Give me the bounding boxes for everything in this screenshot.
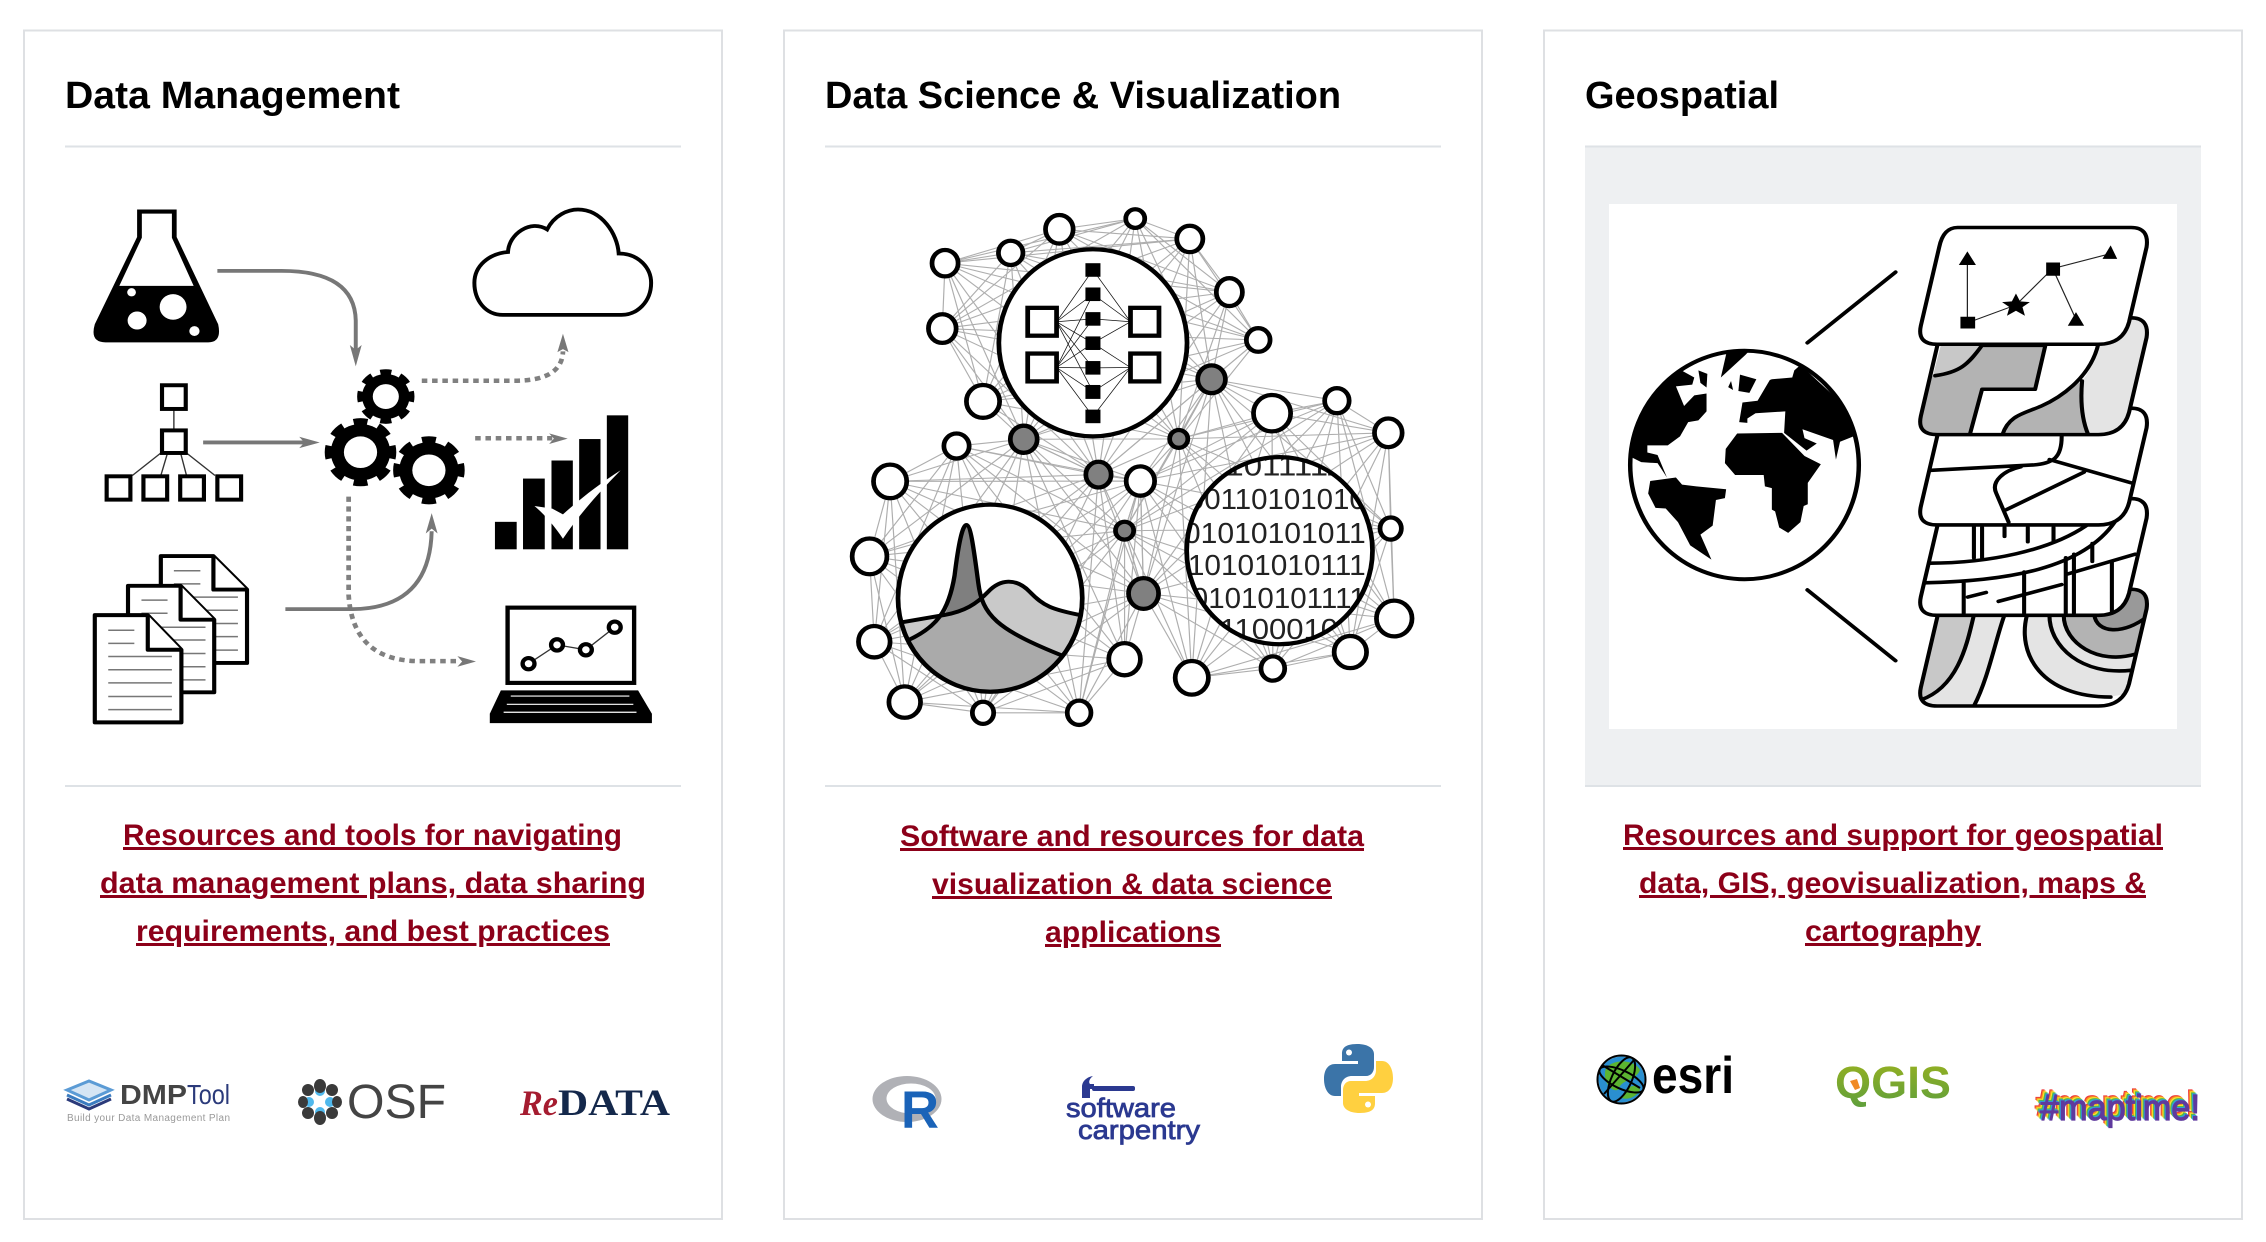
logo: maptime: #maptime! [2040, 1087, 2200, 1128]
map layer: points of interest [1920, 227, 2147, 344]
logo: esri: esri [1652, 1047, 1734, 1105]
circle: density curves [897, 505, 1083, 697]
logo: software carpentry: carpentry [1078, 1115, 1201, 1145]
map layer: contours [1919, 586, 2151, 706]
logo: esri [1596, 1047, 1734, 1105]
logo: QGIS: QGIS [1835, 1057, 1951, 1108]
icon: cloud [474, 210, 651, 315]
logo: DMPTool: DMP [120, 1079, 187, 1110]
icon: hierarchy [107, 385, 241, 500]
icon: documents [95, 556, 247, 722]
logo: ReDATA: Re [519, 1083, 558, 1123]
panel: data science and visualization [784, 30, 1482, 1219]
link text: data management [100, 819, 646, 948]
link text: data management: requirements, and best practices [136, 915, 610, 948]
link text: data science [900, 820, 1364, 949]
arrow: documents to gears [285, 513, 438, 609]
illustration: data lifecycle [94, 210, 652, 723]
arrow: hierarchy to gears [203, 437, 320, 448]
logo: DMPTool: Build your Data Management Plan [67, 1113, 230, 1124]
connector lines [1807, 272, 1896, 661]
heading: geospatial: Geospatial [1585, 75, 1779, 117]
icon: globe [1621, 340, 1874, 579]
arrow: dotted to laptop [349, 497, 476, 667]
logo: R: R [901, 1081, 939, 1140]
arrow: flask to gears [217, 271, 362, 366]
illustration: globe and map layers [1621, 227, 2151, 706]
link text: geospatial [1623, 819, 2163, 948]
link text: data science: applications [1045, 916, 1221, 949]
arrow: dotted to cloud [422, 334, 568, 381]
circle: neural network [999, 249, 1187, 436]
link text: geospatial: Resources and support for geospatial [1623, 819, 2163, 852]
link text: data science: Software and resources for data [900, 820, 1364, 853]
icon: gears [329, 372, 461, 500]
circle: binary digits: 01010101111 [1192, 583, 1366, 614]
circle: binary digits: 10101010111 [1188, 550, 1366, 582]
logo: maptime: #maptime! [2038, 1085, 2198, 1126]
logo: ReDATA: DATA [558, 1083, 670, 1124]
logo: maptime: #maptime! [2037, 1084, 2197, 1125]
heading: data science and visualization: Data Science & Visualization [825, 75, 1341, 117]
logo: DMPTool [67, 1079, 230, 1124]
link text: data management: data management plans, data sharing [100, 867, 646, 900]
map layer: boundaries [1920, 408, 2147, 525]
network nodes: white [852, 209, 1412, 725]
logo: OSF [298, 1076, 446, 1129]
logo: ReDATA [519, 1083, 670, 1124]
heading: data management: Data Management [65, 75, 400, 117]
map layer: land use [1917, 317, 2151, 436]
logo: Python [1324, 1044, 1393, 1113]
logo: maptime: #maptime! [2039, 1086, 2199, 1127]
icon: flask [94, 210, 219, 342]
circle: binary digits [1184, 451, 1372, 646]
link text: data management: Resources and tools for navigating [123, 819, 622, 852]
icon: laptop [490, 608, 652, 723]
arrow: dotted to bar chart [475, 433, 568, 444]
circle: binary digits: 00110101010 [1188, 484, 1366, 516]
logo: DMPTool: Tool [187, 1079, 230, 1110]
link text: data science: visualization & data science [932, 868, 1332, 901]
image background [1585, 146, 2201, 786]
link text: geospatial: cartography [1805, 915, 1981, 948]
link text: geospatial: data, GIS, geovisualization, maps & [1639, 867, 2146, 900]
circle: binary digits: 1100010 [1219, 615, 1338, 646]
circle: binary digits: 01010101011 [1184, 518, 1366, 549]
logo: software carpentry: software [1066, 1093, 1176, 1123]
panel: data management [24, 30, 722, 1219]
panel: geospatial [1544, 30, 2242, 1219]
illustration: network diagram [852, 209, 1412, 725]
network nodes: gray [1010, 365, 1225, 609]
logo: OSF: OSF [347, 1076, 446, 1129]
network links [870, 219, 1394, 713]
logo: software carpentry [1066, 1076, 1201, 1145]
map layer: street grid [1920, 499, 2147, 615]
logo: maptime: #maptime! [2036, 1083, 2196, 1124]
circle: binary digits: 1011111 [1225, 451, 1344, 482]
icon: bar chart with check [495, 415, 628, 549]
logo: R [872, 1076, 942, 1140]
logo: maptime: #maptime! [2035, 1082, 2195, 1123]
